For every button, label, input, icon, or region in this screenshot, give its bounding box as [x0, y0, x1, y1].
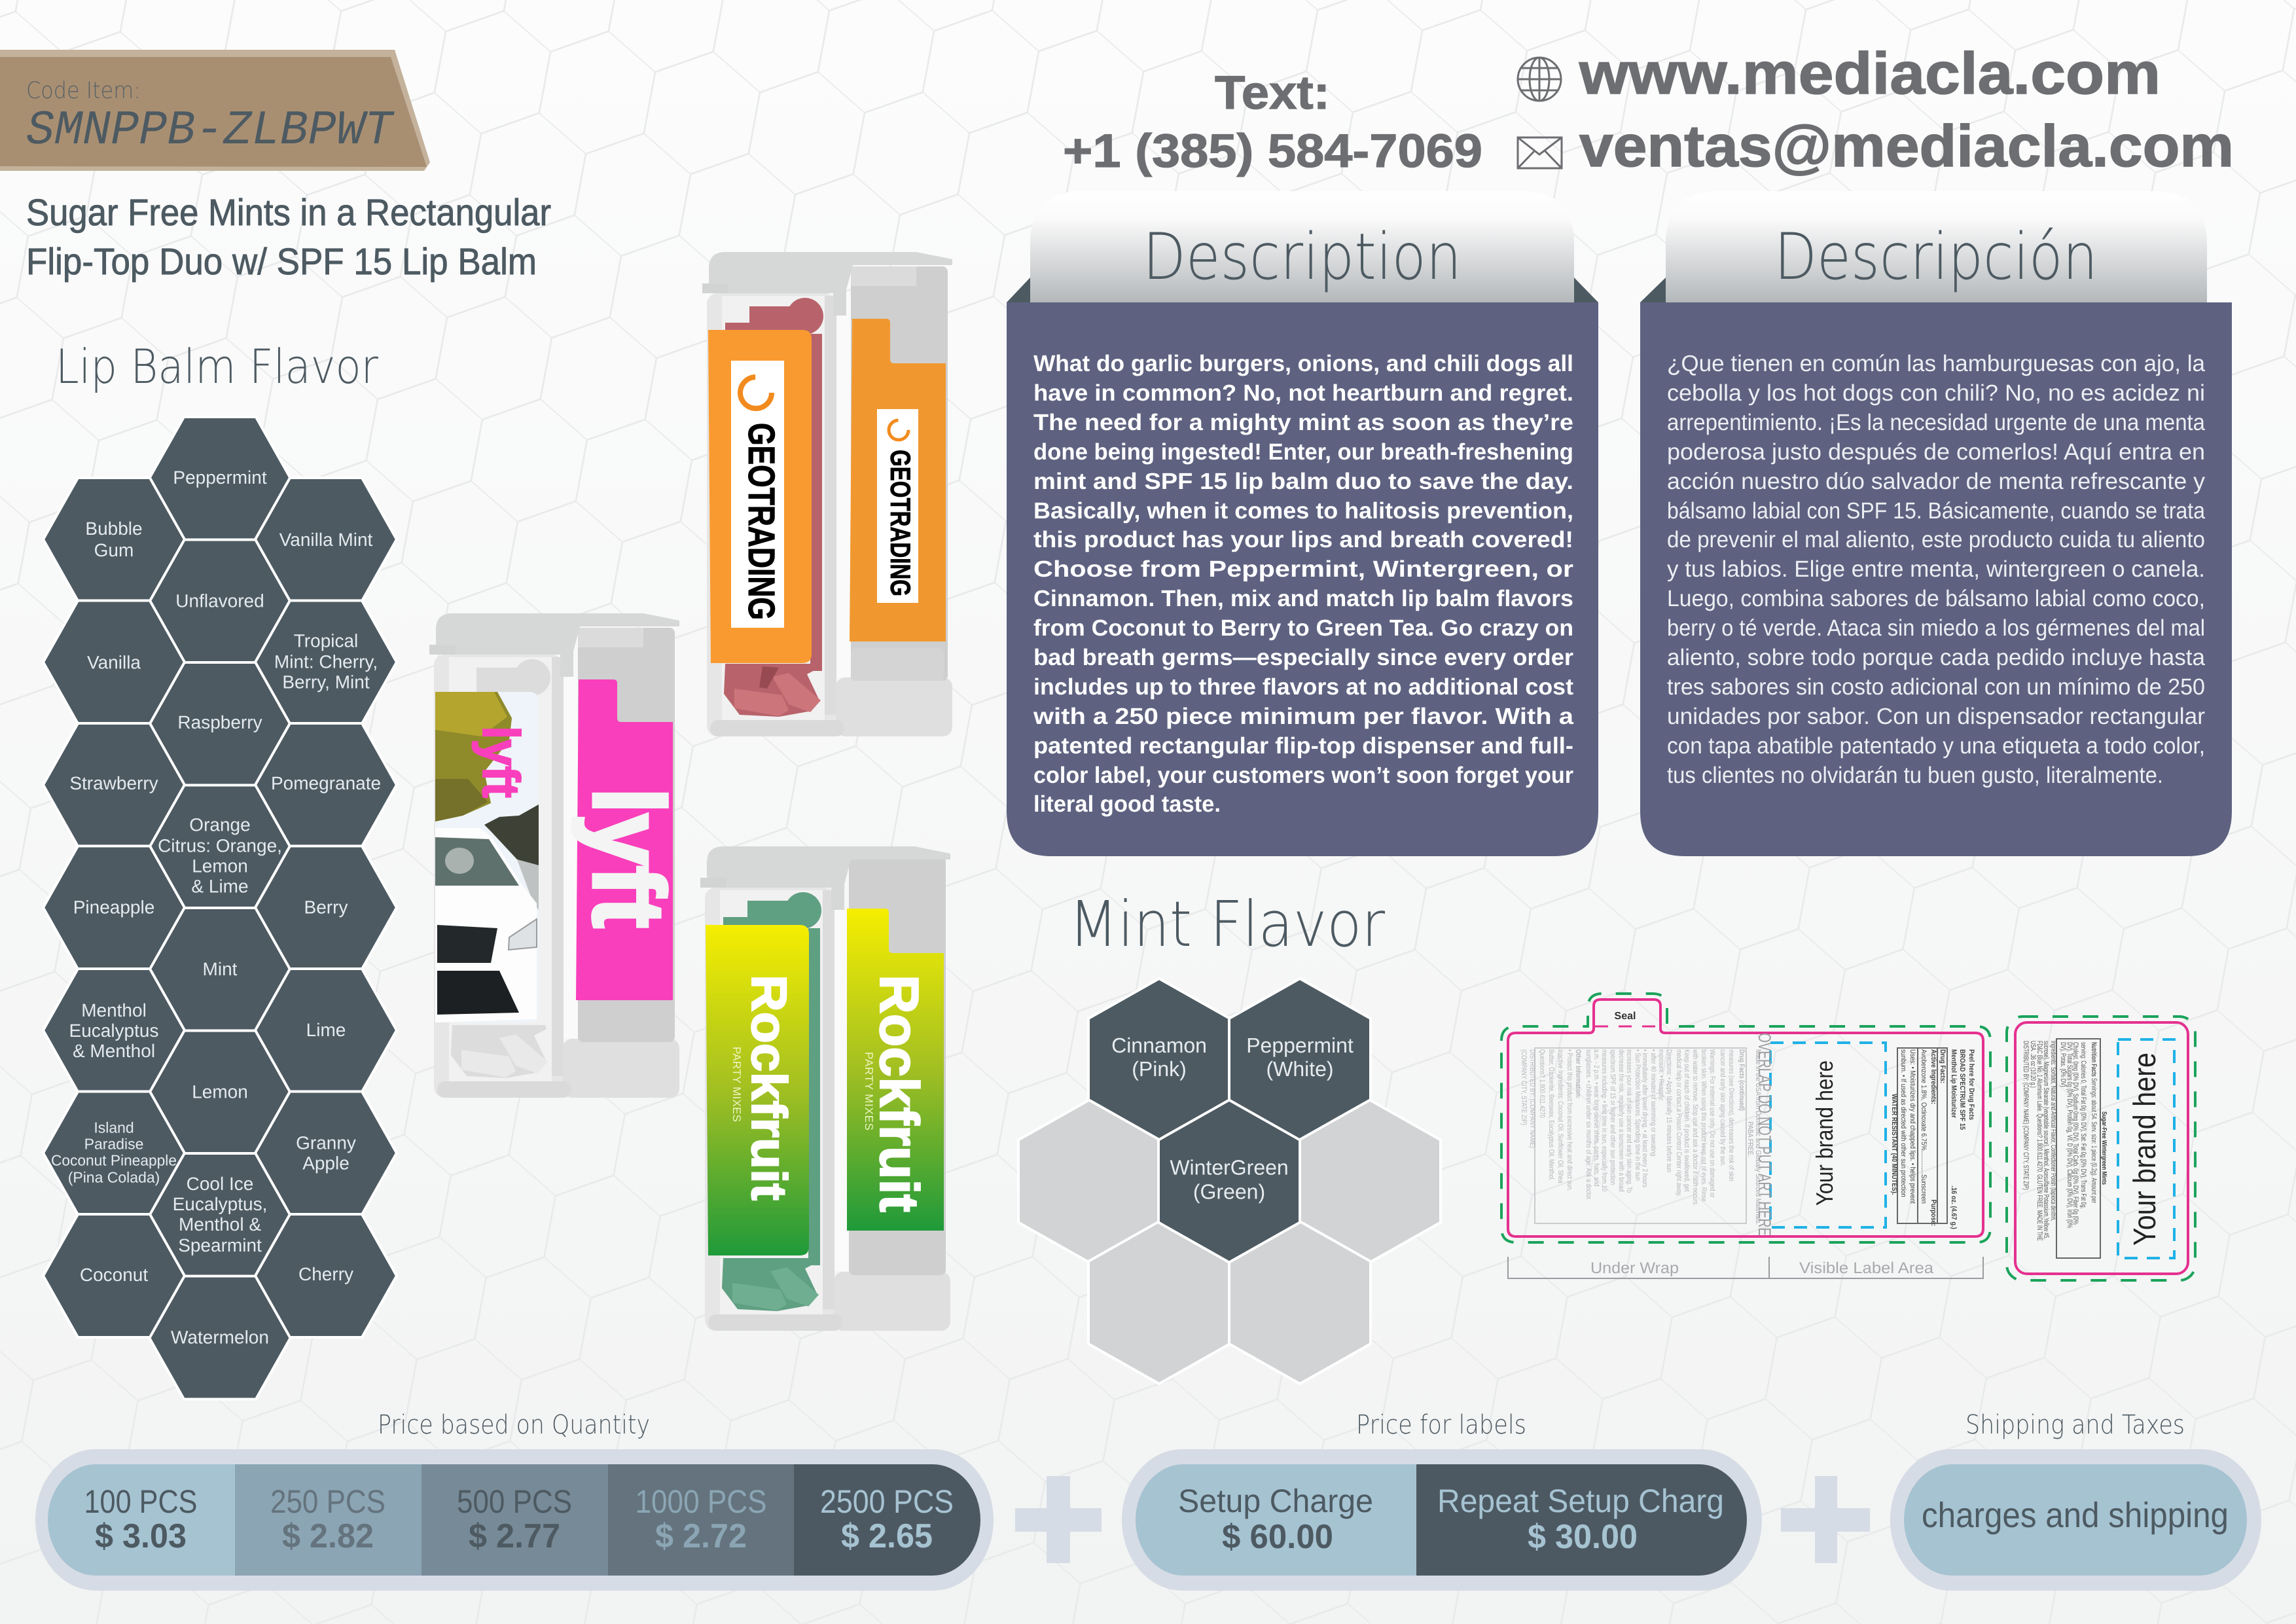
drug facts panel back: measures including: • limit time in sun, especially from 10	[1600, 1049, 1608, 1191]
hex: Peppermint: Peppermint	[173, 467, 267, 488]
ingredients: sucrose), Magnesium Stearate (vegetable source), Menthol, Acesulfame Potassium,Yellow #5,	[2042, 1041, 2050, 1239]
drug facts panel back: Directions: • Apply liberally 15 minutes before sun	[1665, 1049, 1673, 1172]
product name: Sugar-Free Wintergreen Mints	[2100, 1111, 2108, 1185]
hex: Pomegranate: Pomegranate	[271, 773, 381, 793]
overlap warning: OVERLAP DO NOT PUT ART HERE	[1755, 1033, 1774, 1236]
drug facts panel front: sunburn. • If used as directed with other sun protection	[1899, 1049, 1907, 1197]
text block: English description: bad breath germs—especially since every order	[1033, 645, 1573, 670]
hex: Coconut: Coconut	[80, 1265, 148, 1285]
repeat setup charge: Repeat Setup Charg	[1437, 1483, 1724, 1519]
product photo: green Rockfruit duo: PARTY MIXES	[863, 1052, 875, 1130]
hex: Cool Ice: Cool Ice	[187, 1174, 253, 1194]
label pricing pill	[1122, 1449, 1762, 1591]
hex: Cinnamon: Cinnamon	[1111, 1034, 1207, 1057]
hex: Cherry	[255, 1214, 397, 1337]
drug facts panel back: • immediately after towel drying. • at least every 2 hours	[1641, 1049, 1649, 1187]
setup charge	[1136, 1464, 1416, 1576]
panel: descripción (Spanish)	[1640, 191, 2232, 856]
banner: code item: Code Item:	[26, 78, 141, 104]
text block: Spanish description: bálsamo labial con SPF 15. Básicamente, cuando se trata	[1667, 498, 2205, 524]
hex: Cherry: Cherry	[298, 1264, 353, 1284]
contact: text number	[1063, 67, 1482, 177]
hex: Island Paradise: Coconut Pineapple	[51, 1152, 177, 1169]
tier: 250 PCS: $ 2.82	[282, 1517, 374, 1555]
text block: English description: patented rectangular flip-top dispenser and full-	[1033, 733, 1573, 759]
hex: Vanilla: Vanilla	[87, 652, 141, 673]
text block: English description: mint and SPF 15 lip balm duo to save the day.	[1033, 469, 1573, 494]
tier: 100 PCS: 100 PCS	[84, 1483, 198, 1520]
hex: Peppermint mint: (White)	[1266, 1057, 1334, 1081]
nutrition facts box: Cholest. 0mg (0% DV), Sodium 0mg (0% DV), Total Carb. 0g (0% DV), Fiber 0g (0%	[2072, 1042, 2079, 1225]
drug facts panel back: Keep out of reach of children. If product is swallowed, get	[1683, 1049, 1691, 1191]
product photo: green Rockfruit duo	[700, 846, 950, 1331]
hex: Cool Ice: Menthol &	[179, 1214, 261, 1235]
tier: 2500 PCS: $ 2.65	[841, 1517, 933, 1555]
text block: Spanish description: tus clientes no olvidarán tu buen gusto, literalmente.	[1667, 763, 2163, 788]
hex: Coconut	[43, 1214, 185, 1337]
drug facts panel front: Drug Facts:	[1939, 1049, 1946, 1083]
hex: Orange Citrus: Orange	[189, 814, 251, 835]
drug facts panel back: (COMPANY CITY, STATE ZIP)	[1520, 1049, 1528, 1125]
hex: Berry: Berry	[304, 897, 348, 918]
tier: 500 PCS: $ 2.77	[469, 1517, 560, 1555]
hex: Granny Apple: Granny	[296, 1132, 356, 1153]
icon: plus	[1015, 1476, 1102, 1563]
text block: English description: Choose from Peppermint, Wintergreen, or	[1033, 556, 1573, 582]
hex: Vanilla Mint	[255, 478, 397, 601]
hex: Vanilla Mint: Vanilla Mint	[279, 530, 373, 550]
hex: Peppermint mint	[1229, 979, 1371, 1141]
text block: Spanish description: cebolla y los hot dogs con chili? No, no es acidez ni	[1667, 380, 2205, 406]
hex: Watermelon	[149, 1276, 291, 1399]
drug facts panel back: Warnings: For external use only. Do not use on damaged or	[1708, 1049, 1716, 1198]
drug facts panel back: • Protect this product from excessive heat and direct sun.	[1566, 1049, 1573, 1191]
label template: mints	[2007, 1017, 2195, 1280]
hex: Island Paradise	[43, 1092, 185, 1215]
drug facts panel front: Uses: • Moisturizes dry and chapped lips. • helps prevent	[1909, 1049, 1916, 1204]
hex: Bubble Gum: Gum	[94, 540, 134, 560]
hex: Orange Citrus: & Lime	[191, 876, 249, 897]
hex: Lemon: Lemon	[192, 1081, 248, 1102]
heading: shipping and taxes: Shipping and Taxes	[1965, 1410, 2185, 1440]
mint label: car photo: lyft	[472, 726, 530, 798]
mint label: car photo	[435, 692, 539, 1022]
text block: Spanish description: unidades por sabor. Con un dispensador rectangular	[1667, 704, 2205, 729]
made in usa note: PABA FREE.	[1746, 1122, 1754, 1157]
drug facts panel back: measures (see Directions), decreases the risk of skin	[1727, 1049, 1735, 1182]
tier: 250 PCS	[235, 1464, 422, 1576]
hex: Strawberry: Strawberry	[69, 773, 158, 793]
icon: plus	[1781, 1476, 1870, 1563]
text block: Spanish description	[1667, 351, 2206, 788]
product title: Flip-Top Duo w/ SPF 15 Lip Balm	[26, 241, 537, 283]
drug facts panel back	[1520, 1048, 1746, 1223]
drug facts panel back: increases your risk of skin cancer and early skin aging. To	[1625, 1049, 1633, 1193]
text block: English description: literal good taste.	[1033, 791, 1221, 817]
hex: Mint	[149, 908, 291, 1031]
icon: globe	[1518, 58, 1561, 101]
made in usa note	[1746, 1049, 1762, 1225]
text block: Spanish description: y tus labios. Elige entre menta, wintergreen o canela.	[1667, 556, 2205, 582]
lip balm label: pink	[572, 679, 685, 1000]
drug facts panel back: Inactive Ingredients: Coconut Oil, Sunflower Oil, Shea	[1556, 1049, 1564, 1183]
tier: 250 PCS: 250 PCS	[270, 1483, 386, 1520]
text block: English description: color label, your customers won’t soon forget your	[1033, 763, 1573, 788]
hex: Peppermint mint: Peppermint	[1246, 1034, 1354, 1057]
hex: empty left	[1018, 1100, 1160, 1262]
hex: Menthol Eucalyptus: Eucalyptus	[69, 1020, 158, 1041]
drug facts panel back: exposure. • Reapply:	[1657, 1049, 1665, 1101]
repeat setup charge	[1416, 1464, 1747, 1576]
tier: 100 PCS: $ 3.03	[95, 1517, 187, 1555]
hex: Unflavored: Unflavored	[175, 590, 264, 611]
tier: 500 PCS	[422, 1464, 608, 1576]
shipping pill: charges and shipping	[1922, 1496, 2229, 1535]
ingredients: Ingredients: Sorbitol, Natural and Artificial Flavor, Confectioner Polish (tapioca dextrin,	[2049, 1041, 2057, 1221]
hex: Island Paradise: Paradise	[84, 1135, 143, 1152]
email: ventas@mediacla.com	[1579, 114, 2234, 179]
under wrap bracket: Visible Label Area	[1799, 1259, 1934, 1277]
your brand here: Your brand here	[2128, 1053, 2162, 1246]
hex: Granny Apple	[255, 1092, 397, 1215]
ingredients: FD&C Blue No. 1 Aluminum Lake. Questions? 1.800.611.4270. GLUTEN FREE. MADE IN THE	[2036, 1041, 2043, 1241]
hex: Pomegranate	[255, 723, 397, 846]
quantity pricing pill	[35, 1449, 994, 1591]
hex: WinterGreen	[1158, 1100, 1300, 1262]
hex: Island Paradise: Island	[94, 1119, 134, 1136]
drug facts panel back: broken skin. When using this product keep out of eyes. Rinse	[1700, 1049, 1708, 1202]
hex: Tropical Mint	[255, 601, 397, 724]
product title: Sugar Free Mints in a Rectangular	[26, 192, 551, 234]
label template: lip balm wrap	[1501, 994, 1990, 1278]
lip balm label: pink: lyft	[572, 787, 685, 928]
lip balm flavor honeycomb	[43, 417, 397, 1399]
hex: WinterGreen: (Green)	[1193, 1180, 1265, 1203]
product photo: orange Geotrading duo: GEOTRADING	[884, 450, 916, 596]
hex: empty bottom right	[1229, 1221, 1371, 1384]
drug facts panel front: Avobenzone 1.8%, Octinoxate 6.75%..............Sunscreen	[1920, 1049, 1928, 1204]
setup charge: $ 60.00	[1222, 1518, 1333, 1556]
hex: empty right	[1299, 1100, 1441, 1262]
drug facts panel back: with water to remove. Stop use and ask a doctor if rash occurs.	[1691, 1049, 1699, 1206]
hex: Raspberry	[149, 662, 291, 785]
drug facts panel back: Butter, Ozokerite, Beeswax, Eucalyptus Oil, Menthol.	[1547, 1049, 1555, 1181]
drug facts panel front: Menthol Lip Moisturizer	[1950, 1049, 1958, 1119]
made in usa note: Made in the USA from Domestic and Globally Sourced Materials.	[1754, 1049, 1762, 1225]
drug facts panel back: spectrum SPF of 15 or higher and other sun protection	[1609, 1049, 1617, 1185]
hex: Orange Citrus	[149, 785, 291, 909]
drug facts panel back: Questions? 1.800.611.4270	[1538, 1049, 1546, 1118]
drug facts panel front: .16 oz. (4.67 g.)	[1950, 1185, 1958, 1229]
heading: price for labels: Price for labels	[1356, 1410, 1526, 1440]
tier: 500 PCS: 500 PCS	[457, 1483, 572, 1520]
hex: Cool Ice: Eucalyptus,	[173, 1194, 267, 1214]
product photo: pink Lyft duo	[429, 613, 685, 1098]
text block: Spanish description: ¿Que tienen en común las hamburguesas con ajo, la	[1667, 351, 2206, 376]
text block: Spanish description: tres sabores sin costo adicional con un mínimo de 250	[1667, 674, 2205, 700]
ingredients	[2022, 1041, 2057, 1241]
banner: code item: SMNPPB-ZLBPWT	[26, 103, 395, 158]
shipping pill	[1890, 1449, 2261, 1591]
tier: 1000 PCS: 1000 PCS	[635, 1483, 767, 1520]
product photo: green Rockfruit duo: Rockfruit	[869, 975, 930, 1212]
text block: Spanish description: Luego, combina sabores de bálsamo labial como coco,	[1667, 586, 2205, 611]
text block: English description: this product has your lips and breath covered!	[1033, 527, 1573, 552]
text block: Spanish description: berry o té verde. Ataca sin miedo a los gérmenes del mal	[1667, 615, 2205, 641]
hex: Menthol Eucalyptus	[43, 969, 185, 1092]
hex: Vanilla	[43, 601, 185, 724]
hex: Bubble Gum	[43, 478, 185, 601]
mint flavor honeycomb	[1018, 979, 1441, 1384]
icon: envelope	[1518, 137, 1562, 168]
text block: Spanish description: con tapa abatible patentado y una etiqueta a todo color,	[1667, 733, 2205, 759]
drug facts panel back: Other Information:	[1574, 1049, 1582, 1098]
text block: English description: Cinnamon. Then, mix and match lip balm flavors	[1033, 586, 1573, 611]
drug facts panel front: Active Ingredients:	[1929, 1049, 1937, 1104]
hex: Lemon	[149, 1030, 291, 1153]
hex: empty bottom left	[1088, 1221, 1230, 1384]
text block: English description: have in common? No, not heartburn and regret.	[1033, 380, 1573, 406]
drug facts panel front: Peel here for Drug Facts	[1967, 1049, 1975, 1120]
banner: code item	[0, 50, 430, 171]
panel: description (English)	[1007, 191, 1598, 856]
nutrition facts box: DV), Potas. (0% DV)	[2059, 1042, 2067, 1087]
text block: English description	[1033, 351, 1574, 817]
tier: 100 PCS	[48, 1464, 235, 1576]
drug facts panel front: Purpose:	[1929, 1200, 1937, 1226]
hex: Strawberry	[43, 723, 185, 846]
ingredients: DISTRIBUTED BY: (COMPANY NAME) (COMPANY CITY, STATE ZIP)	[2022, 1041, 2030, 1190]
drug facts panel back: medical help or contact a Poison Control Center right away.	[1675, 1049, 1683, 1197]
hex: Peppermint	[149, 417, 291, 540]
hex: Watermelon: Watermelon	[171, 1327, 269, 1347]
drug facts panel back: • after 40 minutes of swimming or sweating	[1649, 1049, 1657, 1156]
text block: English description: What do garlic burgers, onions, and chili dogs all	[1033, 351, 1573, 376]
text block: English description: includes up to three flavors at no additional cost	[1033, 674, 1573, 700]
hex: Tropical Mint: Mint: Cherry,	[274, 652, 378, 672]
nutrition facts box: DV), Total Sugars 0g (0% DV), Protein 0g, Vit. D (0% DV), Calcium (0% DV), Iron (0%	[2066, 1042, 2073, 1228]
nutrition facts box: Nutrition Facts Servings: about 54. Serv. size: 1 piece (0.2g). Amount per	[2090, 1042, 2098, 1203]
contact: text number: Text:	[1215, 67, 1330, 119]
tier: 1000 PCS: $ 2.72	[655, 1517, 747, 1555]
hex: Pineapple: Pineapple	[73, 897, 154, 918]
nutrition facts box	[2056, 1039, 2100, 1258]
hex: Island Paradise: (Pina Colada)	[68, 1169, 160, 1186]
tab: description heading: Description	[1143, 220, 1462, 295]
text block: English description: Basically, when it comes to halitosis prevention,	[1033, 498, 1573, 524]
text block: Spanish description: arrepentimiento. ¡Es la necesidad urgente de una menta	[1667, 410, 2205, 435]
product photo: green Rockfruit duo: Rockfruit	[741, 975, 797, 1200]
nutrition facts box: serving: Calories 0, Total Fat 0g (0% DV), Sat. Fat 0g (0% DV), Trans Fat 0g,	[2079, 1042, 2087, 1209]
hex: Tropical Mint: Berry, Mint	[282, 672, 370, 693]
product title	[26, 192, 551, 283]
drug facts panel back: a.m. - 2 p.m. • wear long-sleeve shirts, pants, hats, and	[1592, 1049, 1600, 1187]
text block: English description: The need for a mighty mint as soon as they’re	[1033, 410, 1573, 435]
website: www.mediacla.com	[1579, 41, 2161, 107]
your brand here: Your brand here	[1811, 1060, 1838, 1206]
drug facts panel back: Drug Facts (continued)	[1738, 1049, 1746, 1111]
drug facts panel back: decrease the risk, regularly use a sunscreen with a broad	[1617, 1049, 1625, 1191]
hex: Cool Ice	[149, 1153, 291, 1276]
hex: Berry	[255, 846, 397, 969]
hex: Bubble Gum: Bubble	[85, 518, 143, 539]
drug facts panel front	[1890, 1048, 1975, 1229]
tier: 2500 PCS: 2500 PCS	[820, 1483, 954, 1520]
drug facts panel front: WATER RESISTANT (40 MINUTES).	[1890, 1094, 1898, 1195]
repeat setup charge: $ 30.00	[1528, 1518, 1638, 1556]
hex: Menthol Eucalyptus: Menthol	[81, 1000, 147, 1020]
drug facts panel front: BROAD SPECTRUM SPF 15	[1958, 1049, 1966, 1130]
contact: text number: +1 (385) 584-7069	[1063, 125, 1482, 177]
ingredients: USA. .36 oz (10.20 g.)	[2029, 1041, 2037, 1088]
seal text: Seal	[1615, 1011, 1636, 1022]
product photo: orange Geotrading duo: GEOTRADING	[740, 423, 782, 620]
text block: Spanish description: de prevenir el mal aliento, este producto cuida tu aliento	[1667, 527, 2205, 552]
drug facts panel back: • Sun Protection Measures. Spending time in the sun	[1634, 1049, 1641, 1181]
drug facts panel back: cancer and early skin aging caused by the sun.	[1719, 1049, 1727, 1166]
under wrap bracket	[1508, 1257, 1983, 1278]
hex: Lime: Lime	[306, 1020, 346, 1040]
hex: Cinnamon: (Pink)	[1132, 1057, 1187, 1081]
hex: Menthol Eucalyptus: & Menthol	[73, 1041, 155, 1061]
hex: Orange Citrus: Lemon	[192, 856, 248, 876]
tab: descripción heading: Descripción	[1774, 220, 2098, 295]
text block: Spanish description: acción nuestro dúo salvador de menta refrescante y	[1667, 469, 2206, 494]
heading: price based on quantity: Price based on Quantity	[378, 1410, 650, 1440]
tier: 1000 PCS	[608, 1464, 794, 1576]
product photo: green Rockfruit duo: PARTY MIXES	[730, 1047, 743, 1122]
text block: Spanish description: aliento, sobre todo porque cada pedido incluye hasta	[1667, 645, 2206, 670]
hex: Cool Ice: Spearmint	[178, 1235, 262, 1255]
hex: Granny Apple: Apple	[302, 1153, 350, 1173]
hex: Orange Citrus: Citrus: Orange,	[158, 835, 282, 856]
under wrap bracket: Under Wrap	[1590, 1259, 1679, 1277]
drug facts panel back: sunglasses. • children under six months of age: Ask a doctor.	[1585, 1049, 1592, 1200]
hex: Pineapple	[43, 846, 185, 969]
tab: description heading	[1030, 191, 1574, 302]
hex: Tropical Mint: Tropical	[294, 631, 358, 651]
tab: descripción heading	[1666, 191, 2207, 302]
heading: lip balm flavor: Lip Balm Flavor	[56, 339, 378, 394]
drug facts panel back: DISTRIBUTED BY: (COMPANY NAME)	[1528, 1049, 1536, 1148]
text block: English description: with a 250 piece minimum per flavor. With a	[1033, 704, 1574, 729]
product photo: orange Geotrading duo	[702, 252, 952, 736]
hex: Cinnamon	[1088, 979, 1230, 1141]
text block: Spanish description: poderosa justo después de comerlos! Aquí entra en	[1667, 439, 2205, 465]
hex: Mint: Mint	[203, 959, 238, 979]
hex: WinterGreen: WinterGreen	[1170, 1156, 1289, 1180]
hex: Lime	[255, 969, 397, 1092]
hex: Raspberry: Raspberry	[177, 712, 262, 732]
tier: 2500 PCS	[794, 1464, 980, 1576]
setup charge: Setup Charge	[1178, 1483, 1373, 1519]
hex: Unflavored	[149, 539, 291, 662]
text block: English description: from Coconut to Berry to Green Tea. Go crazy on	[1033, 615, 1573, 641]
text block: English description: done being ingested! Enter, our breath-freshening	[1033, 439, 1573, 465]
heading: mint flavor: Mint Flavor	[1069, 888, 1385, 961]
